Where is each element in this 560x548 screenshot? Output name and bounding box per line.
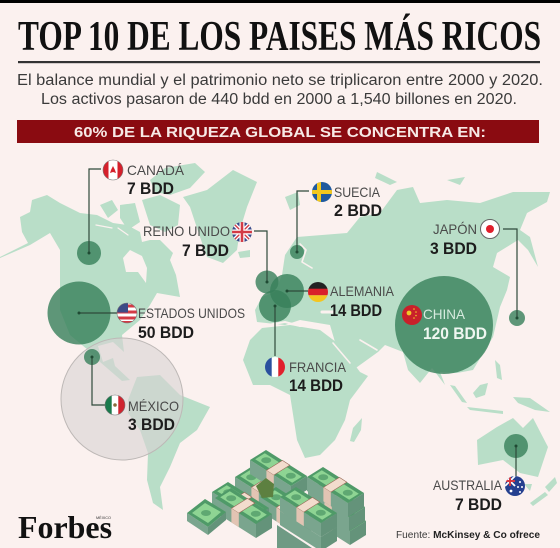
label: suecia	[334, 184, 382, 220]
circle: méxico range	[61, 338, 183, 460]
north america	[0, 195, 180, 381]
indonesia and oceania islands	[450, 360, 550, 414]
africa	[243, 325, 368, 458]
greenland	[183, 170, 257, 263]
arctic islands	[100, 163, 205, 232]
source: Fuente: McKinsey & Co ofrece	[396, 529, 540, 541]
connector: estados unidos	[78, 312, 117, 314]
connector: alemania	[286, 290, 308, 292]
label: alemania: ALEMANIA	[330, 283, 395, 299]
label: australia: 7 BDD	[455, 496, 502, 514]
intro text: El balance mundial y el patrimonio neto se triplicaron entre 2000 y 2020.	[17, 72, 543, 89]
label: estados unidos: 50 BDD	[138, 324, 194, 342]
label: suecia: SUECIA	[334, 184, 381, 200]
circle: francia	[259, 290, 291, 322]
circle: alemania	[270, 274, 304, 308]
connector: suecia	[296, 191, 309, 254]
connector: reino unido	[254, 231, 268, 284]
label: francia: 14 BDD	[289, 377, 343, 395]
flag: alemania	[308, 282, 328, 302]
circle: australia	[504, 434, 528, 458]
flag: francia	[265, 357, 285, 377]
australia	[477, 418, 548, 477]
label: japón: 3 BDD	[430, 240, 477, 258]
flag: canadá	[103, 160, 123, 180]
label: estados unidos: ESTADOS UNIDOS	[138, 305, 245, 321]
label: canadá: 7 BDD	[127, 180, 174, 198]
intro text	[17, 72, 543, 108]
south america	[128, 375, 210, 510]
label: australia: AUSTRALIA	[433, 477, 503, 493]
flag: australia	[505, 476, 525, 496]
connector: francia	[274, 304, 276, 356]
label: canadá: CANADÁ	[127, 162, 185, 178]
label: japón	[430, 221, 477, 258]
connector: canadá	[88, 169, 101, 254]
world map	[0, 163, 557, 510]
circle: reino unido	[256, 270, 278, 294]
flag: china	[402, 305, 422, 325]
label: japón: JAPÓN	[433, 221, 477, 237]
connector: japón	[503, 229, 518, 320]
label: china	[423, 306, 487, 343]
connector: australia	[514, 444, 518, 476]
forbes logo: Forbes	[18, 509, 112, 545]
circle: méxico	[84, 349, 100, 365]
label: china: CHINA	[423, 306, 466, 322]
iceland and svalbard	[238, 172, 465, 258]
flag: reino unido	[232, 222, 252, 242]
label: méxico: MÉXICO	[128, 398, 179, 414]
label: canadá	[127, 162, 185, 198]
label: alemania: 14 BDD	[330, 302, 382, 320]
circle: suecia	[290, 245, 304, 259]
label: méxico: 3 BDD	[128, 416, 175, 434]
label: reino unido: REINO UNIDO	[143, 223, 230, 239]
flag: méxico	[105, 395, 125, 415]
circle: japón	[509, 310, 525, 326]
label: china: 120 BDD	[423, 325, 487, 343]
hudson bay	[123, 250, 147, 283]
circle: china	[395, 276, 493, 374]
banner	[17, 120, 539, 143]
flag: estados unidos	[117, 303, 137, 324]
label: méxico	[128, 398, 179, 434]
circle: canadá	[77, 241, 101, 265]
label: francia: FRANCIA	[289, 359, 347, 375]
money stacks	[187, 450, 366, 548]
seas	[96, 212, 377, 363]
label: francia	[289, 359, 347, 395]
label: reino unido	[143, 223, 230, 260]
label: estados unidos	[138, 305, 245, 342]
label: suecia: 2 BDD	[334, 202, 382, 220]
flag: japón	[480, 220, 500, 238]
eurasia	[255, 187, 550, 385]
flag: suecia	[312, 182, 332, 202]
label: alemania	[330, 283, 395, 320]
circle: estados unidos	[48, 282, 110, 344]
intro text: Los activos pasaron de 440 bdd en 2000 a 1,540 billones en 2020.	[41, 91, 517, 108]
connector: méxico	[90, 356, 105, 405]
label: australia	[433, 477, 503, 514]
label: reino unido: 7 BDD	[182, 242, 229, 260]
banner: 60% DE LA RIQUEZA GLOBAL SE CONCENTRA EN:	[74, 124, 486, 141]
forbes logo: MÉXICO	[96, 515, 111, 520]
